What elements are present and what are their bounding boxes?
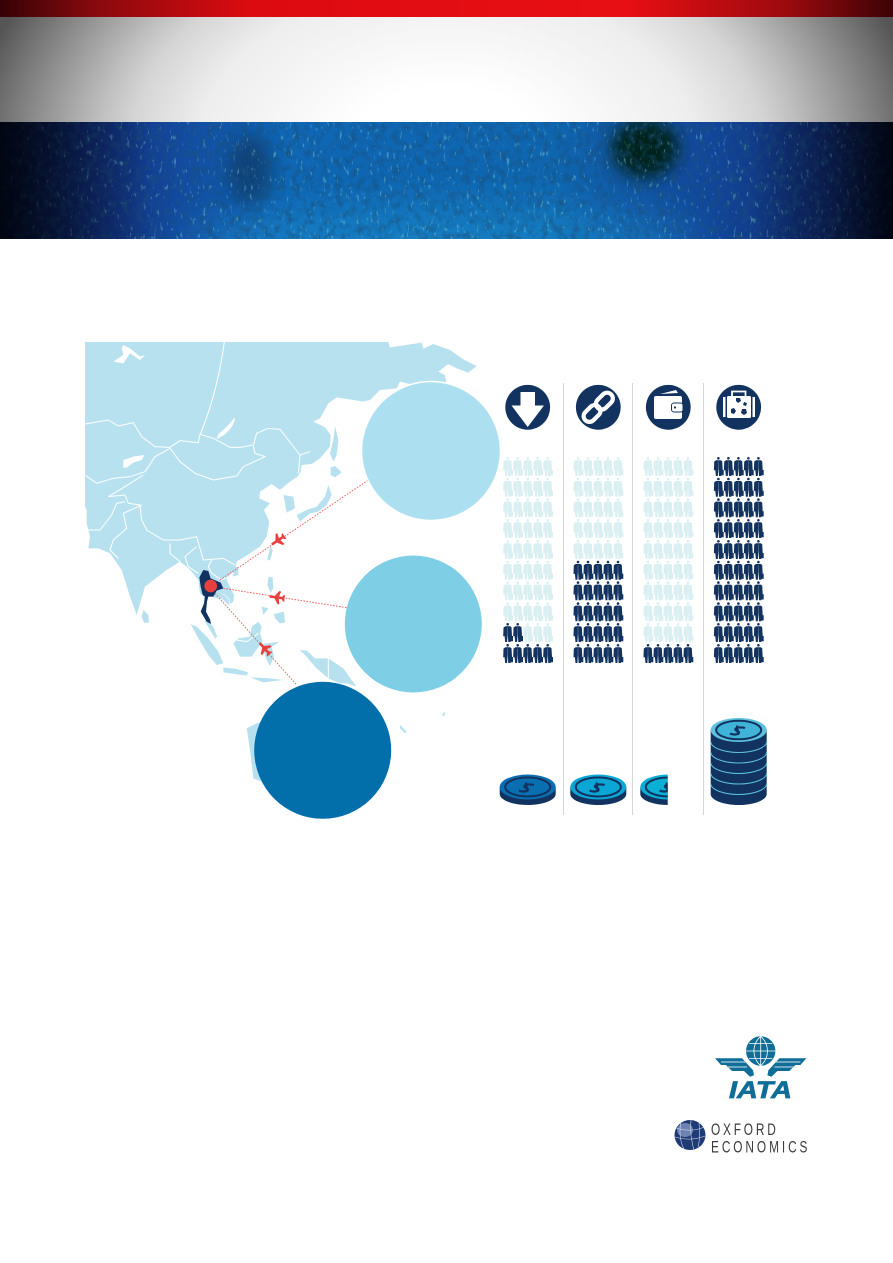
icon: chain link (576, 385, 621, 430)
origin marker: Thailand (204, 580, 217, 592)
Cambodia and Vietnam outline (218, 593, 230, 606)
pictogram: column 3, people (644, 457, 693, 663)
red flag stripe (0, 0, 893, 17)
circle: Oceania (254, 682, 391, 819)
pictogram: column 2, people (574, 457, 623, 663)
route line: Northeast Asia (220, 480, 368, 580)
coin: column 3 (partial) (640, 774, 668, 805)
icon: plane on Oceania route (255, 639, 275, 659)
pictogram: column 1, people (503, 457, 553, 663)
coin: column 2 (570, 774, 626, 805)
globe (746, 1036, 775, 1066)
logo: Oxford Economics (674, 1120, 807, 1157)
circle: Northeast Asia (362, 382, 500, 520)
land masses (85, 342, 477, 782)
map of Asia-Pacific (85, 342, 477, 782)
pictogram: column 4, people (714, 457, 764, 663)
globe (674, 1120, 706, 1150)
coin: column 1 (500, 774, 556, 805)
wings (715, 1058, 806, 1077)
icon: down arrow (505, 385, 550, 430)
circle: Southeast Asia (345, 556, 482, 692)
blue flag stripe with texture (0, 122, 893, 239)
route line: Oceania (215, 593, 297, 685)
logo: IATA (715, 1036, 806, 1104)
Thailand highlighted (199, 570, 223, 624)
header: flag banner (0, 0, 893, 239)
icon: wallet (646, 385, 691, 430)
lakes (113, 345, 235, 468)
coin stack: column 4 (711, 718, 767, 805)
wordmark: OXFORD (711, 1121, 776, 1140)
logo: Oxford Economics: ECONOMICS (711, 1139, 807, 1157)
column dividers (564, 383, 704, 815)
icon: plane on north-east route (268, 530, 288, 550)
icon: plane on south-east route (268, 590, 286, 605)
wordmark: IATA (729, 1077, 792, 1104)
icon: suitcase (716, 385, 761, 430)
country borders (85, 342, 328, 678)
route line: Southeast Asia (223, 588, 347, 608)
white flag stripe (0, 17, 893, 122)
